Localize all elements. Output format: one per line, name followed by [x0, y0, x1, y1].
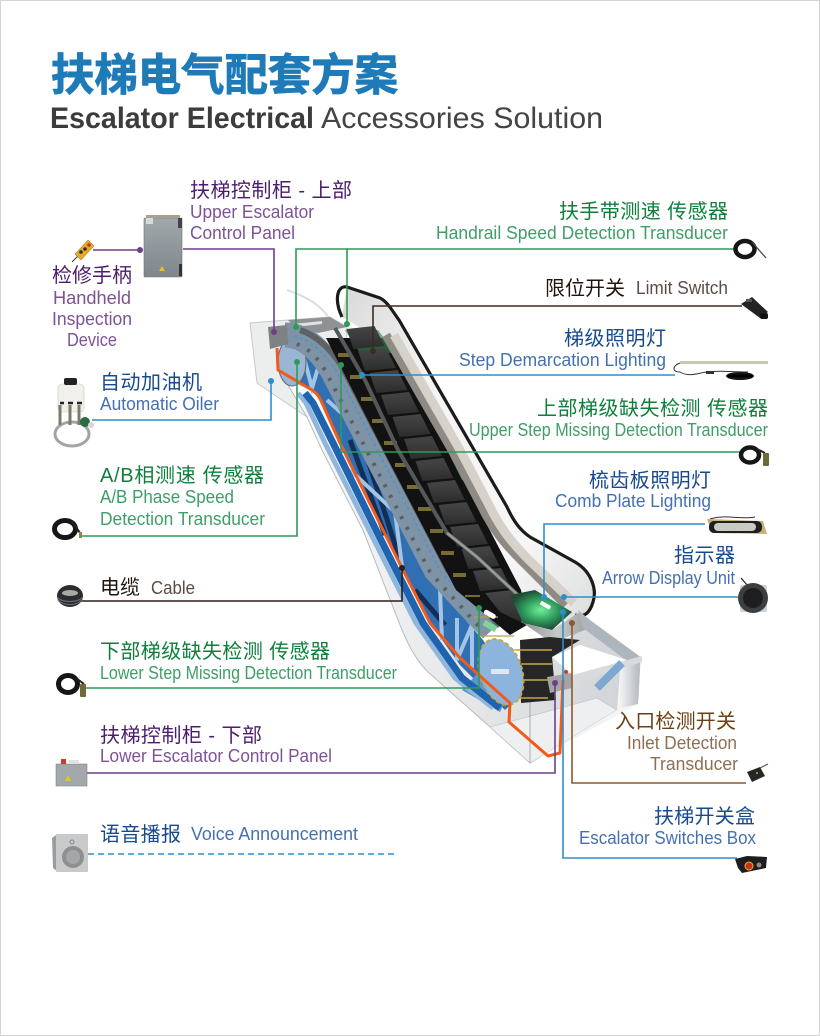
- label: inlet detection transducer: [615, 710, 738, 774]
- label: A/B phase speed transducer: A/B Phase Speed: [100, 487, 234, 507]
- label: handrail speed transducer: Handrail Speed Detection Transducer: [436, 223, 728, 243]
- label: lower control panel: [100, 724, 332, 766]
- label: cable: 电缆: [100, 576, 140, 599]
- label: lower control panel: 扶梯控制柜 - 下部: [100, 724, 262, 747]
- icon: lower control panel: [56, 759, 87, 786]
- label: handheld inspection device: [52, 264, 132, 350]
- icon: lower step sensor coil: [58, 676, 86, 697]
- label: upper step missing transducer: 上部梯级缺失检测 传感器: [537, 397, 768, 420]
- label: upper control panel: 扶梯控制柜 - 上部: [190, 179, 352, 202]
- upper control box: [268, 325, 288, 349]
- icon: upper control panel: [144, 215, 182, 277]
- lower drive chain: [520, 637, 580, 703]
- label: voice announcement: [100, 823, 358, 846]
- icon: inlet detection switch: [747, 764, 768, 782]
- lower landing plate with green lighting: [482, 590, 592, 643]
- icon: LED strip light: [674, 361, 768, 380]
- label: arrow display unit: [602, 544, 735, 588]
- connector dots: [137, 247, 575, 686]
- truss outer cover: [285, 380, 640, 763]
- icon: voice announcement speaker: [52, 834, 88, 872]
- label: comb plate lighting: 梳齿板照明灯: [589, 469, 711, 492]
- label: lower step missing transducer: 下部梯级缺失检测 传感器: [100, 640, 330, 663]
- chain band: [285, 330, 500, 632]
- label: step demarcation lighting: Step Demarcation Lighting: [459, 350, 666, 370]
- label: voice announcement: Voice Announcement: [191, 824, 358, 844]
- icon: arrow display unit: [738, 578, 768, 613]
- yellow step rollers: [338, 354, 530, 680]
- label: handheld inspection device: Device: [67, 330, 117, 350]
- label: comb plate lighting: Comb Plate Lighting: [555, 491, 711, 511]
- label: automatic oiler: Automatic Oiler: [100, 394, 219, 414]
- label: upper step missing transducer: [469, 397, 768, 440]
- icon: handrail sensor coil: [736, 241, 766, 258]
- label: lower control panel: Lower Escalator Control Panel: [100, 746, 332, 766]
- title: Accessories Solution: [321, 102, 603, 135]
- label: handheld inspection device: Handheld: [53, 288, 131, 308]
- icon: A/B phase sensor coil: [54, 520, 82, 538]
- handrail: [337, 287, 594, 616]
- label: upper step missing transducer: Upper Step Missing Detection Transducer: [469, 420, 768, 440]
- label: handheld inspection device: 检修手柄: [52, 264, 132, 287]
- label: handrail speed transducer: 扶手带测速 传感器: [559, 200, 728, 223]
- truss side strips: [298, 393, 500, 708]
- label: cable: [100, 576, 195, 599]
- label: lower step missing transducer: Lower Step Missing Detection Transducer: [100, 663, 397, 683]
- label: lower step missing transducer: [100, 640, 397, 683]
- label: A/B phase speed transducer: Detection Transducer: [100, 509, 265, 529]
- label: voice announcement: 语音播报: [100, 823, 181, 846]
- connector lines: [80, 249, 746, 858]
- icon: escalator switches box: [735, 856, 767, 873]
- label: automatic oiler: [100, 371, 219, 414]
- title: [50, 51, 603, 135]
- icon: comb plate light: [707, 517, 767, 534]
- title: Escalator Electrical: [50, 102, 314, 135]
- label: step demarcation lighting: 梯级照明灯: [564, 327, 666, 350]
- label: arrow display unit: 指示器: [674, 544, 735, 567]
- icon: automatic oiler: [55, 378, 94, 446]
- label: upper control panel: Upper Escalator: [190, 202, 314, 222]
- label: upper control panel: Control Panel: [190, 223, 295, 243]
- lower drive gear: [471, 633, 552, 711]
- label: upper control panel: [190, 179, 352, 243]
- label: step demarcation lighting: [459, 327, 666, 370]
- title: 扶梯电气配套方案: [51, 51, 398, 100]
- label: A/B phase speed transducer: A/B相测速 传感器: [100, 464, 264, 487]
- label: automatic oiler: 自动加油机: [100, 371, 202, 394]
- label: limit switch: Limit Switch: [636, 278, 728, 298]
- escalator illustration: [250, 287, 642, 763]
- upper landing box: [250, 290, 347, 417]
- label: cable: Cable: [151, 578, 195, 598]
- label: inlet detection transducer: Transducer: [650, 754, 738, 774]
- label: limit switch: [545, 277, 728, 300]
- escalator steps: [346, 326, 525, 623]
- icon: upper step sensor coil: [741, 448, 769, 466]
- label: arrow display unit: Arrow Display Unit: [602, 568, 735, 588]
- label: inlet detection transducer: Inlet Detection: [627, 733, 737, 753]
- label: inlet detection transducer: 入口检测开关: [615, 710, 736, 733]
- lower box and legs: [490, 660, 640, 763]
- lower control box: [547, 670, 572, 693]
- label: escalator switches box: [579, 805, 756, 848]
- inner rail: [335, 328, 525, 623]
- label: A/B phase speed transducer: [100, 464, 265, 529]
- orange cable run: [277, 348, 563, 756]
- glass balustrade: [342, 287, 594, 622]
- icon: cable coil: [57, 585, 83, 607]
- label: limit switch: 限位开关: [545, 277, 625, 300]
- skirt: [386, 335, 574, 605]
- label: handheld inspection device: Inspection: [52, 309, 132, 329]
- blue truss: [285, 345, 520, 712]
- label: handrail speed transducer: [436, 200, 728, 243]
- label: escalator switches box: 扶梯开关盒: [654, 805, 755, 828]
- label: escalator switches box: Escalator Switches Box: [579, 828, 756, 848]
- icon: handheld device: [72, 240, 94, 262]
- lower landing frame: [552, 610, 642, 688]
- step band background: [326, 338, 527, 635]
- label: comb plate lighting: [555, 469, 711, 511]
- upper drive gear: [278, 338, 306, 386]
- icon: limit switch: [741, 297, 768, 319]
